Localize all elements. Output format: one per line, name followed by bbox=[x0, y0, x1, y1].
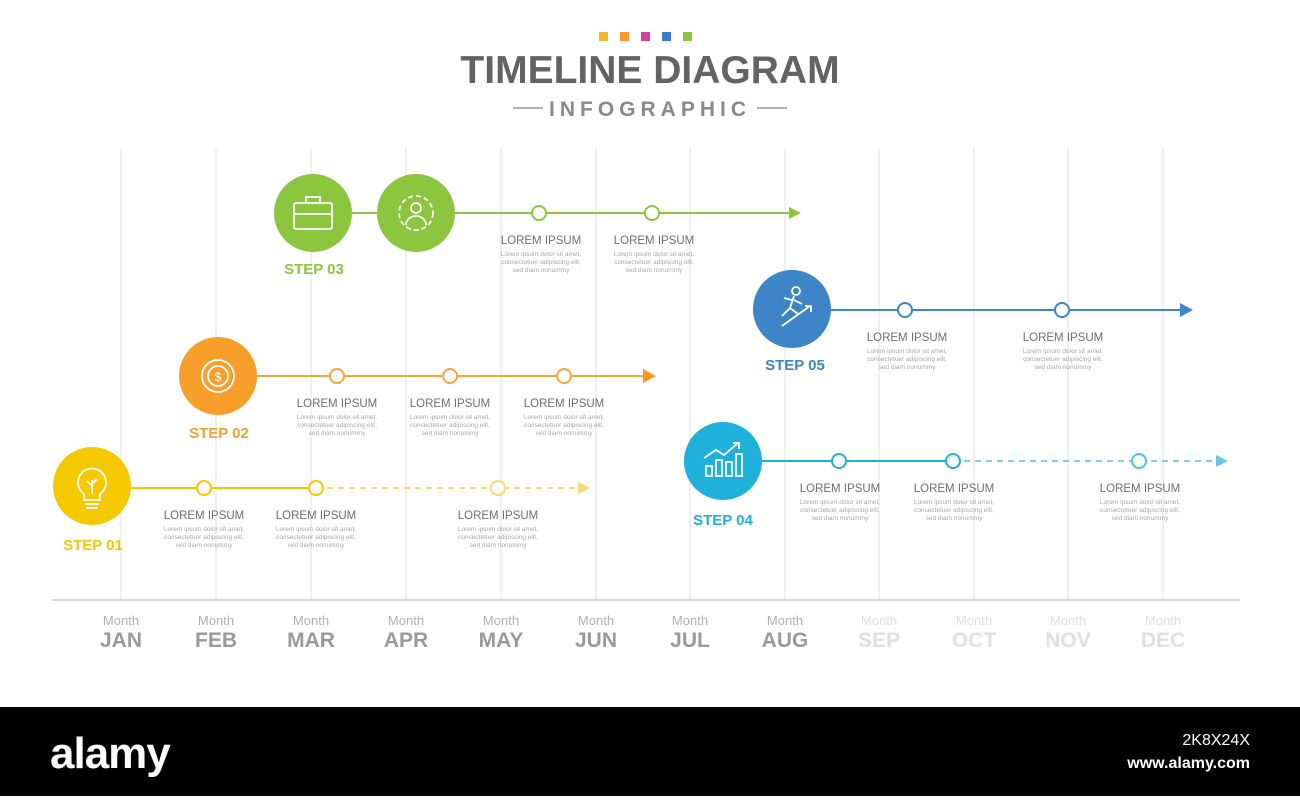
step 05 bbox=[753, 270, 1193, 374]
lorem text blocks: consectetuer adipiscing elit, bbox=[410, 422, 490, 429]
lorem text blocks: LOREM IPSUM bbox=[501, 235, 581, 247]
month axis labels: Month bbox=[1050, 613, 1086, 628]
lorem text blocks: consectetuer adipiscing elit, bbox=[501, 259, 581, 266]
lorem text blocks: LOREM IPSUM bbox=[614, 235, 694, 247]
lorem text blocks: Lorem ipsum dolor sit amet, bbox=[1023, 348, 1103, 355]
month axis labels: JUL bbox=[670, 629, 710, 652]
lorem text blocks: consectetuer adipiscing elit, bbox=[800, 507, 880, 514]
lorem text blocks: sed diam nonummy bbox=[470, 542, 527, 549]
step 02: STEP 02 bbox=[189, 425, 249, 442]
month axis labels: Month bbox=[767, 613, 803, 628]
lorem text blocks: LOREM IPSUM bbox=[1100, 483, 1180, 495]
month axis labels: APR bbox=[384, 629, 428, 652]
lorem text blocks: sed diam nonummy bbox=[288, 542, 345, 549]
lorem text blocks: LOREM IPSUM bbox=[800, 483, 880, 495]
step 03: STEP 03 bbox=[284, 261, 344, 278]
lorem text blocks: sed diam nonummy bbox=[176, 542, 233, 549]
step 04 bbox=[684, 422, 1228, 529]
lorem text blocks: consectetuer adipiscing elit, bbox=[867, 356, 947, 363]
lorem text blocks: sed diam nonummy bbox=[879, 364, 936, 371]
lorem text blocks: Lorem ipsum dolor sit amet, bbox=[867, 348, 947, 355]
month axis labels: Month bbox=[1145, 613, 1181, 628]
month axis labels: Month bbox=[578, 613, 614, 628]
lorem text blocks: consectetuer adipiscing elit, bbox=[914, 507, 994, 514]
lorem text blocks: sed diam nonummy bbox=[926, 515, 983, 522]
lorem text blocks: consectetuer adipiscing elit, bbox=[524, 422, 604, 429]
lorem text blocks: LOREM IPSUM bbox=[914, 483, 994, 495]
lorem text blocks: consectetuer adipiscing elit, bbox=[297, 422, 377, 429]
step 04: STEP 04 bbox=[693, 512, 754, 529]
lorem text blocks: LOREM IPSUM bbox=[276, 510, 356, 522]
lorem text blocks: Lorem ipsum dolor sit amet, bbox=[614, 251, 694, 258]
title block: TIMELINE DIAGRAM bbox=[460, 49, 840, 92]
lorem text blocks: LOREM IPSUM bbox=[164, 510, 244, 522]
lorem text blocks: sed diam nonummy bbox=[309, 430, 366, 437]
month axis labels: Month bbox=[672, 613, 708, 628]
month axis labels: Month bbox=[293, 613, 329, 628]
lorem text blocks: LOREM IPSUM bbox=[867, 332, 947, 344]
lorem text blocks: LOREM IPSUM bbox=[297, 398, 377, 410]
title block bbox=[460, 32, 840, 121]
month axis labels: SEP bbox=[858, 629, 900, 652]
lorem text blocks bbox=[164, 235, 1180, 549]
lorem text blocks: Lorem ipsum dolor sit amet, bbox=[164, 526, 244, 533]
month axis labels: FEB bbox=[195, 629, 237, 652]
lorem text blocks: Lorem ipsum dolor sit amet, bbox=[1100, 499, 1180, 506]
lorem text blocks: sed diam nonummy bbox=[422, 430, 479, 437]
lorem text blocks: sed diam nonummy bbox=[513, 267, 570, 274]
month axis labels bbox=[100, 613, 1185, 652]
footer bar bbox=[0, 707, 1300, 796]
step 05: STEP 05 bbox=[765, 357, 825, 374]
month axis labels: Month bbox=[198, 613, 234, 628]
month axis labels: Month bbox=[103, 613, 139, 628]
footer bar: alamy bbox=[50, 729, 171, 778]
lorem text blocks: LOREM IPSUM bbox=[410, 398, 490, 410]
title block: INFOGRAPHIC bbox=[549, 98, 751, 121]
lorem text blocks: sed diam nonummy bbox=[1035, 364, 1092, 371]
footer bar: www.alamy.com bbox=[1126, 755, 1250, 772]
lorem text blocks: Lorem ipsum dolor sit amet, bbox=[524, 414, 604, 421]
step 02: $ bbox=[215, 370, 222, 384]
grid bbox=[121, 148, 1163, 600]
step 02 bbox=[179, 337, 656, 442]
lorem text blocks: consectetuer adipiscing elit, bbox=[164, 534, 244, 541]
month axis labels: OCT bbox=[952, 629, 996, 652]
lorem text blocks: LOREM IPSUM bbox=[524, 398, 604, 410]
lorem text blocks: Lorem ipsum dolor sit amet, bbox=[800, 499, 880, 506]
step 01: STEP 01 bbox=[63, 537, 123, 554]
month axis labels: JAN bbox=[100, 629, 142, 652]
lorem text blocks: consectetuer adipiscing elit, bbox=[276, 534, 356, 541]
month axis labels: Month bbox=[483, 613, 519, 628]
month axis labels: Month bbox=[956, 613, 992, 628]
lorem text blocks: sed diam nonummy bbox=[536, 430, 593, 437]
lorem text blocks: Lorem ipsum dolor sit amet, bbox=[914, 499, 994, 506]
lorem text blocks: Lorem ipsum dolor sit amet, bbox=[410, 414, 490, 421]
step 03 bbox=[274, 174, 801, 278]
month axis labels: Month bbox=[388, 613, 424, 628]
month axis labels: DEC bbox=[1141, 629, 1185, 652]
lorem text blocks: LOREM IPSUM bbox=[458, 510, 538, 522]
lorem text blocks: sed diam nonummy bbox=[626, 267, 683, 274]
lorem text blocks: LOREM IPSUM bbox=[1023, 332, 1103, 344]
month axis labels: Month bbox=[861, 613, 897, 628]
lorem text blocks: Lorem ipsum dolor sit amet, bbox=[276, 526, 356, 533]
month axis labels: NOV bbox=[1045, 629, 1091, 652]
lorem text blocks: consectetuer adipiscing elit, bbox=[1100, 507, 1180, 514]
lorem text blocks: consectetuer adipiscing elit, bbox=[614, 259, 694, 266]
lorem text blocks: Lorem ipsum dolor sit amet, bbox=[501, 251, 581, 258]
lorem text blocks: sed diam nonummy bbox=[812, 515, 869, 522]
month axis labels: JUN bbox=[575, 629, 617, 652]
month axis labels: MAY bbox=[479, 629, 523, 652]
footer bar: 2K8X24X bbox=[1182, 732, 1250, 749]
lorem text blocks: sed diam nonummy bbox=[1112, 515, 1169, 522]
lorem text blocks: consectetuer adipiscing elit, bbox=[458, 534, 538, 541]
lorem text blocks: Lorem ipsum dolor sit amet, bbox=[297, 414, 377, 421]
step 01 bbox=[53, 447, 590, 554]
month axis labels: MAR bbox=[287, 629, 335, 652]
lorem text blocks: Lorem ipsum dolor sit amet, bbox=[458, 526, 538, 533]
lorem text blocks: consectetuer adipiscing elit, bbox=[1023, 356, 1103, 363]
month axis labels: AUG bbox=[762, 629, 808, 652]
